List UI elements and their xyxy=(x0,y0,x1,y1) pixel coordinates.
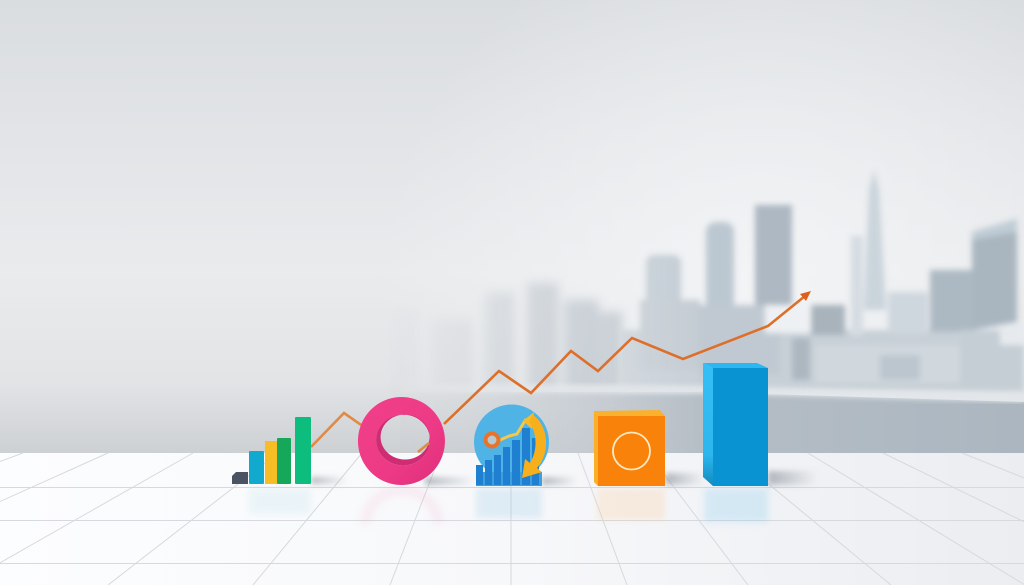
tiled floor xyxy=(0,453,1024,585)
icon: small bar chart xyxy=(232,417,311,484)
faded left buildings xyxy=(452,280,626,388)
misty shoreline xyxy=(400,384,1024,402)
ring inner wall xyxy=(376,414,430,465)
trend line middle and arrow xyxy=(418,291,811,452)
orange ring xyxy=(486,434,498,446)
icon: pink ring xyxy=(358,397,445,485)
object shadows xyxy=(311,471,818,485)
floor grid xyxy=(0,453,1024,585)
arrowhead xyxy=(800,291,811,301)
badge bars xyxy=(476,428,539,485)
icon: orange cube xyxy=(594,410,665,486)
floor reflections xyxy=(249,488,768,524)
icon: blue bar xyxy=(703,363,768,486)
badge circle xyxy=(474,404,549,480)
cube circle outline xyxy=(613,432,650,470)
curved yellow arrow xyxy=(522,415,546,478)
dark chip xyxy=(232,472,248,484)
teal bar xyxy=(249,451,264,484)
yellow arrow line xyxy=(498,419,526,441)
yellow bar xyxy=(265,441,277,484)
main towers xyxy=(620,170,1024,392)
blurred city skyline xyxy=(452,174,1024,453)
green bar xyxy=(277,438,291,484)
mint bar xyxy=(295,417,311,484)
icon: growth badge xyxy=(474,404,549,486)
background sky xyxy=(0,0,1024,454)
trend line behind objects xyxy=(311,413,364,447)
water band xyxy=(456,392,1024,453)
